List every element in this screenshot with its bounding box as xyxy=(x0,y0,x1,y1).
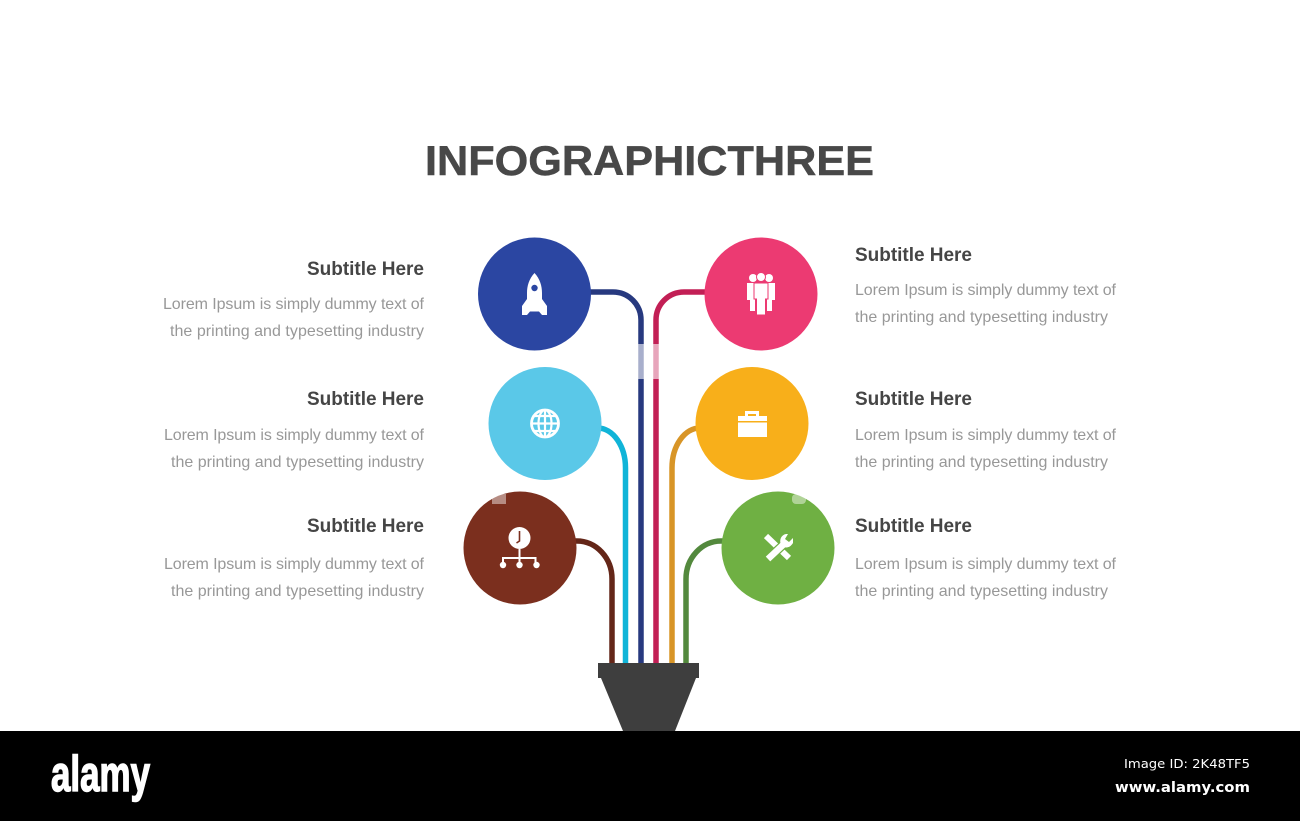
icon: clock hierarchy xyxy=(500,527,540,568)
line: blue xyxy=(588,292,641,664)
description: Lorem Ipsum is simply dummy text of xyxy=(164,556,425,573)
circle: brown clock hierarchy xyxy=(464,492,576,604)
icon: people xyxy=(747,272,775,315)
subtitle: Subtitle Here xyxy=(855,516,972,537)
icon: rocket xyxy=(522,273,547,315)
panel: left item 1 xyxy=(163,259,425,340)
description: Lorem Ipsum is simply dummy text of xyxy=(164,427,425,444)
description xyxy=(855,427,1117,471)
circle: green tools xyxy=(722,492,834,604)
description: Lorem Ipsum is simply dummy text of xyxy=(855,282,1117,299)
description: the printing and typesetting industry xyxy=(855,309,1108,326)
circle: yellow briefcase xyxy=(696,367,808,480)
description xyxy=(164,556,425,600)
description xyxy=(855,556,1117,600)
description: Lorem Ipsum is simply dummy text of xyxy=(163,296,425,313)
description: the printing and typesetting industry xyxy=(171,454,424,471)
line: brown xyxy=(574,541,612,664)
description xyxy=(855,282,1117,326)
panel: right item 3 xyxy=(855,516,1117,600)
logo: alamy: alamy xyxy=(51,746,150,802)
subtitle: Subtitle Here xyxy=(307,389,424,410)
icon: tools xyxy=(766,534,793,559)
website: www.alamy.com xyxy=(1115,780,1250,796)
description: the printing and typesetting industry xyxy=(171,583,424,600)
description: the printing and typesetting industry xyxy=(855,583,1108,600)
title: INFOGRAPHICTHREE xyxy=(425,137,874,184)
subtitle: Subtitle Here xyxy=(307,259,424,280)
description: Lorem Ipsum is simply dummy text of xyxy=(855,556,1117,573)
panel: left item 2 xyxy=(164,389,425,471)
description: the printing and typesetting industry xyxy=(855,454,1108,471)
description xyxy=(163,296,425,340)
watermark patch xyxy=(492,494,506,504)
line: amber xyxy=(672,428,700,664)
icon: briefcase xyxy=(738,411,767,437)
description: Lorem Ipsum is simply dummy text of xyxy=(855,427,1117,444)
subtitle: Subtitle Here xyxy=(855,389,972,410)
funnel base xyxy=(598,663,699,731)
circle: pink people xyxy=(704,238,818,350)
panel: left item 3 xyxy=(164,516,425,600)
line: green xyxy=(686,541,724,664)
subtitle: Subtitle Here xyxy=(307,516,424,537)
subtitle: Subtitle Here xyxy=(855,245,972,266)
watermark patch on lines xyxy=(638,344,660,379)
circle: blue rocket xyxy=(478,238,591,350)
panel: right item 1 xyxy=(855,245,1117,326)
watermark patch xyxy=(792,494,806,504)
circle: cyan globe xyxy=(488,367,602,480)
line: pink xyxy=(656,292,708,664)
description: the printing and typesetting industry xyxy=(170,323,424,340)
description xyxy=(164,427,425,471)
line: cyan xyxy=(598,428,626,664)
connector lines xyxy=(574,292,724,664)
panel: right item 2 xyxy=(855,389,1117,471)
image id: Image ID: 2K48TF5 xyxy=(1124,756,1250,771)
footer bar xyxy=(0,731,1300,821)
icon: globe xyxy=(532,410,558,437)
